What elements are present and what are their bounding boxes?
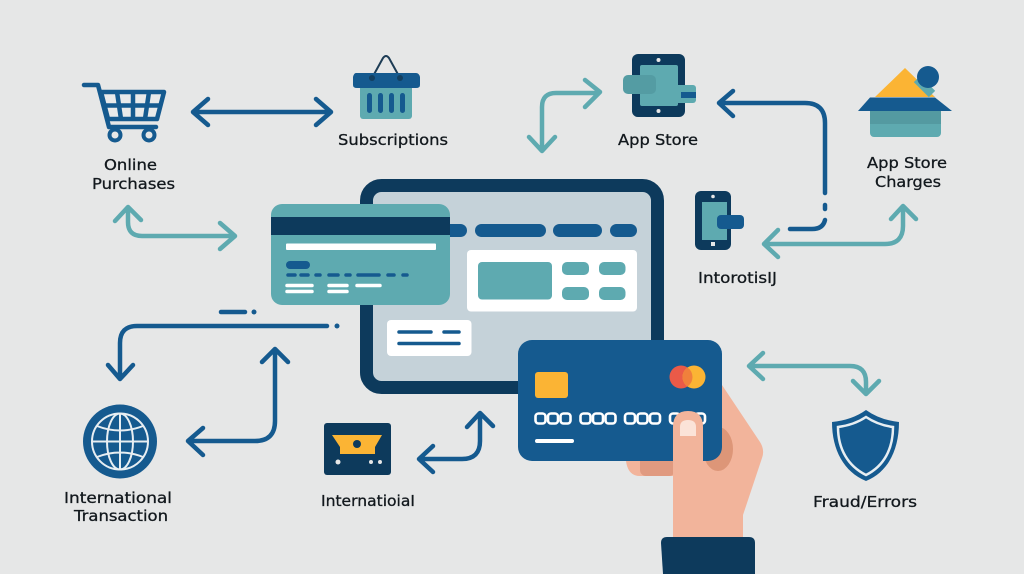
label: app store: App Store bbox=[618, 131, 698, 149]
icon: app store charges house bbox=[858, 66, 952, 137]
label: online purchases: Online bbox=[104, 156, 157, 174]
arrow: card to international transaction bbox=[108, 310, 340, 379]
label: subscriptions: Subscriptions bbox=[338, 131, 448, 149]
arrow: terminal to tablet bbox=[419, 413, 493, 472]
card number bbox=[536, 414, 705, 424]
icon: shield bbox=[832, 410, 899, 481]
arrow: cart to subscriptions bbox=[193, 99, 331, 125]
arrow: phone to charges bbox=[764, 206, 916, 257]
panel: central tablet screen bbox=[366, 186, 658, 388]
label: online purchases: Purchases bbox=[92, 175, 175, 193]
navigation pills bbox=[440, 224, 637, 237]
card chip bbox=[535, 372, 568, 398]
label: app store charges bbox=[867, 154, 947, 191]
panel: teal card bbox=[271, 204, 450, 305]
arrow: app store to phone bbox=[719, 91, 825, 229]
small note panel bbox=[387, 320, 472, 356]
label: international: InternatioiaI bbox=[321, 492, 415, 510]
label: phone: IntorotisIJ bbox=[698, 269, 777, 287]
icon: shopping cart bbox=[84, 85, 164, 140]
illustration: sleeve cuff bbox=[661, 537, 755, 574]
label: app store charges: Charges bbox=[875, 173, 941, 191]
label: international transaction: International bbox=[64, 489, 172, 507]
arrow: globe to card bbox=[188, 349, 288, 455]
arrow: online purchases to card bbox=[115, 207, 235, 249]
icon: phone bbox=[695, 191, 744, 250]
card name line bbox=[535, 439, 574, 443]
panel: blue credit card bbox=[518, 340, 722, 461]
card logo bbox=[670, 366, 706, 388]
illustration: hand holding card bbox=[626, 382, 763, 539]
label: international transaction: Transaction bbox=[73, 507, 168, 525]
icon: app store tablet bbox=[623, 54, 696, 117]
label: online purchases bbox=[92, 156, 175, 193]
illustration: thumb bbox=[673, 411, 703, 470]
arrow: app store to tablet bbox=[529, 80, 600, 151]
content panel bbox=[467, 250, 637, 312]
label: app store charges: App Store bbox=[867, 154, 947, 172]
icon: subscription basket bbox=[353, 56, 420, 119]
icon: globe bbox=[83, 404, 157, 478]
label: fraud errors: Fraud/Errors bbox=[813, 493, 917, 511]
icon: terminal bbox=[324, 423, 391, 475]
label: international transaction bbox=[64, 489, 172, 525]
arrow: card to fraud bbox=[749, 353, 879, 394]
